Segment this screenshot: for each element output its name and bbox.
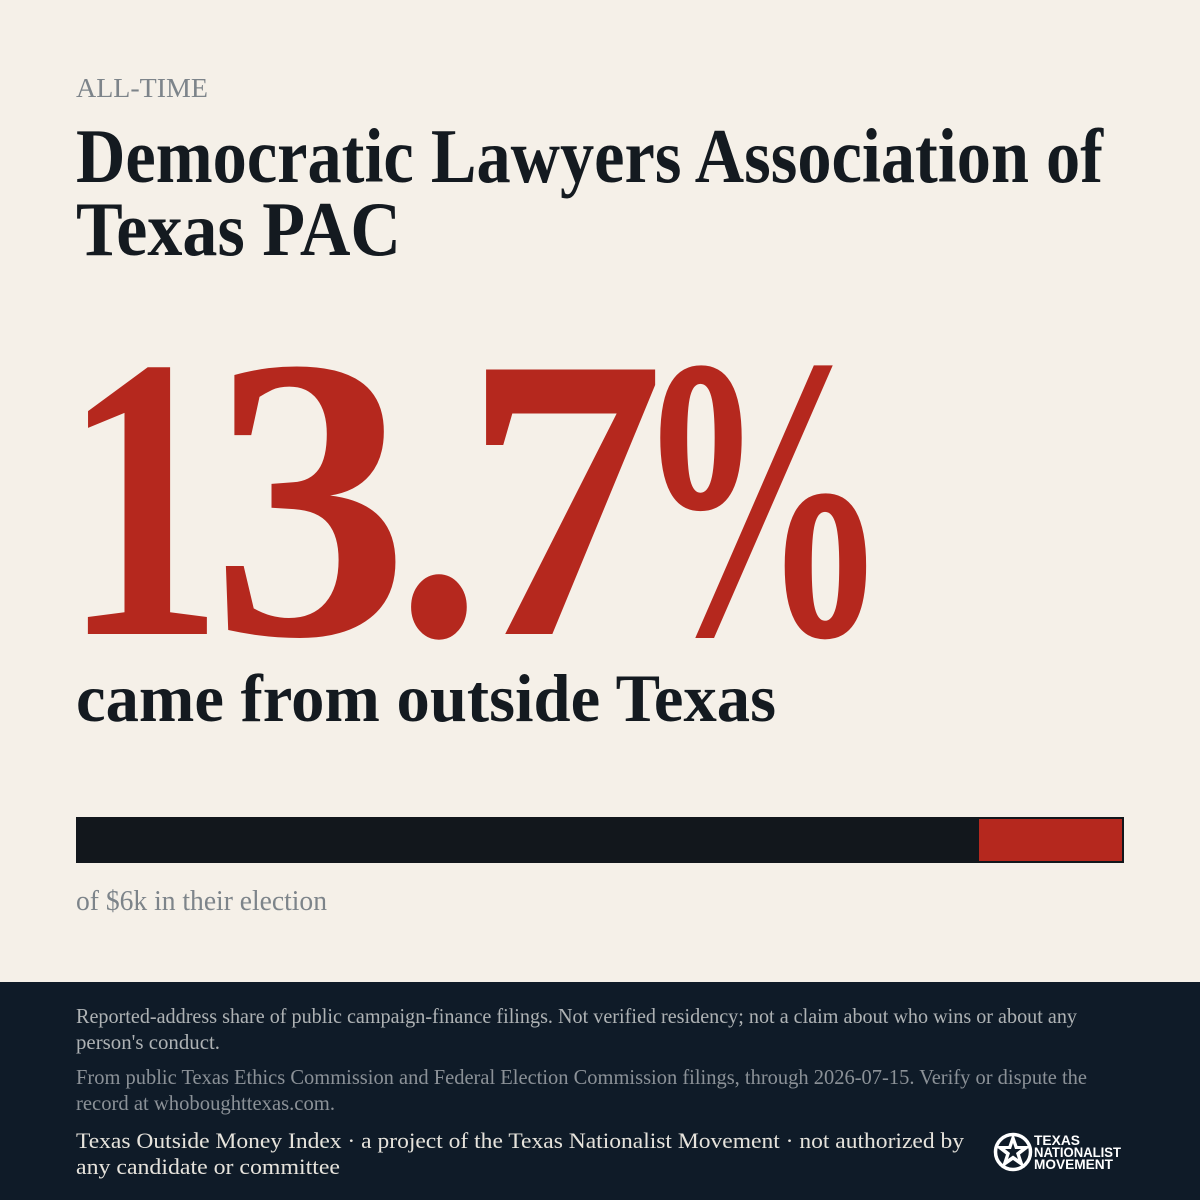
project credit: any candidate or committee — [76, 1154, 340, 1179]
source note: From public Texas Ethics Commission and Federal Election Commission filings, through 2026-07-15. Verify or dispute the — [76, 1065, 1087, 1089]
methodology note: Reported-address share of public campaign-finance filings. Not verified residency; not a claim about who wins or about any — [76, 1004, 1077, 1028]
logo: Texas Nationalist Movement — [995, 1133, 1122, 1172]
progress bar — [76, 817, 1124, 863]
eyebrow label: ALL-TIME — [76, 73, 208, 103]
big percentage — [62, 275, 890, 722]
icon: star in ring — [995, 1133, 1031, 1170]
source note — [76, 1065, 1087, 1115]
project credit — [76, 1128, 964, 1179]
logo wordmark: TEXAS — [1034, 1133, 1080, 1148]
title — [76, 113, 1104, 272]
big percentage: 7 — [463, 275, 665, 722]
logo wordmark — [1034, 1133, 1122, 1172]
title: Democratic Lawyers Association of — [76, 113, 1104, 199]
big percentage: 1 — [62, 275, 224, 722]
big percentage: . — [396, 275, 482, 722]
big percentage: % — [634, 275, 890, 722]
title: Texas PAC — [76, 186, 401, 272]
methodology note: person's conduct. — [76, 1030, 220, 1054]
source note: record at whoboughttexas.com. — [76, 1091, 335, 1115]
project credit: Texas Outside Money Index · a project of the Texas Nationalist Movement · not authorized by — [76, 1128, 964, 1153]
big percentage: 3 — [211, 275, 409, 722]
footer panel — [0, 982, 1200, 1200]
subheading: came from outside Texas — [76, 660, 776, 736]
bar caption: of $6k in their election — [76, 886, 327, 917]
logo wordmark: NATIONALIST — [1034, 1145, 1122, 1160]
logo wordmark: MOVEMENT — [1034, 1157, 1114, 1172]
methodology note — [76, 1004, 1077, 1054]
